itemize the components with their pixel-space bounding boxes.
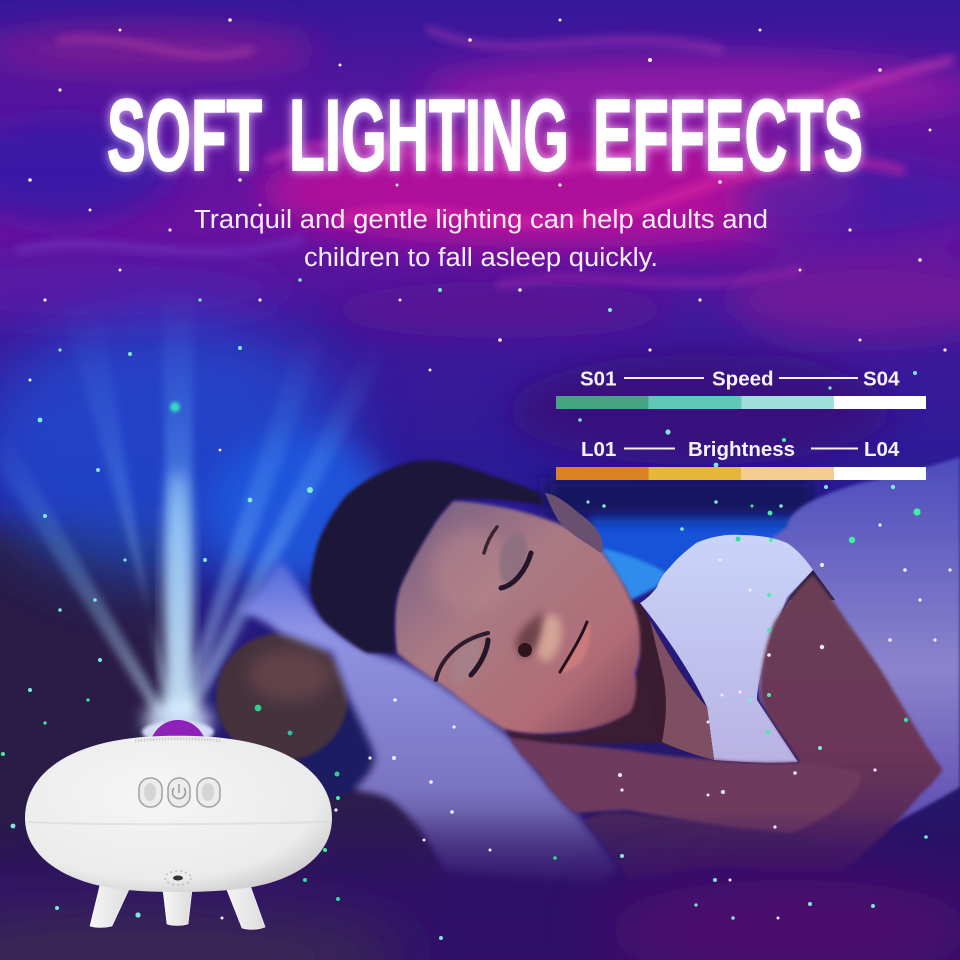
floor left (0, 910, 410, 960)
nostril (518, 643, 532, 657)
shirt (640, 535, 813, 763)
brightness labels: L04 (864, 438, 900, 461)
projector lamp (25, 720, 332, 929)
speed labels: Speed (712, 368, 774, 390)
lower lashes (471, 640, 488, 675)
dome (142, 720, 214, 743)
subtitle (194, 206, 768, 272)
speed labels: S01 (580, 368, 616, 390)
nose highlight (532, 612, 566, 664)
speed labels (580, 368, 900, 390)
speed labels: S04 (863, 368, 900, 390)
power symbol (172, 784, 186, 799)
upper eyelid (495, 530, 531, 586)
brightness scale (556, 438, 926, 480)
brightness labels: Brightness (688, 438, 795, 461)
mouth line (560, 622, 587, 672)
light blue pillow behind neck (601, 548, 666, 600)
brightness labels: L01 (581, 438, 616, 461)
brightness labels (581, 438, 900, 461)
speed bar (556, 396, 926, 409)
bottom magenta tint (600, 880, 960, 960)
button glyphs (144, 783, 214, 801)
stars (11, 278, 928, 940)
face (395, 500, 640, 734)
bed sheet right (740, 457, 960, 840)
boy (310, 460, 943, 880)
subtitle: Tranquil and gentle lighting can help adults and (194, 206, 768, 234)
brightness bar (556, 467, 926, 480)
port (173, 876, 183, 880)
grille (135, 739, 222, 741)
body (25, 736, 332, 892)
upper brow (484, 527, 497, 553)
nose shadow (516, 610, 542, 658)
ear (545, 493, 603, 553)
title: SOFT (107, 80, 262, 192)
light beams glow (0, 320, 355, 750)
green stars (1, 438, 921, 852)
sleeve shadow (775, 570, 835, 625)
title: LIGHTING (289, 80, 569, 192)
dark sofa left (0, 520, 440, 960)
lower arm (584, 813, 844, 880)
cheek glow (430, 528, 510, 612)
hair (310, 460, 545, 653)
buttons (139, 778, 220, 807)
lower eyelid (447, 634, 485, 686)
forearm and hand (510, 735, 861, 833)
speed scale (556, 368, 926, 409)
neck shadow (600, 600, 714, 760)
plush toy (216, 633, 372, 800)
jaw shadow (505, 660, 657, 744)
lower brow (436, 633, 488, 680)
bottom fade (0, 810, 960, 960)
dark shape under pillow (320, 796, 445, 930)
upper lashes (501, 553, 531, 588)
title (107, 80, 863, 192)
background: bedroom blue glow (210, 435, 815, 585)
lips (561, 620, 590, 672)
light beams fan (0, 290, 390, 715)
chest skin (650, 620, 714, 760)
subtitle: children to fall asleep quickly. (304, 244, 658, 272)
legs (90, 885, 265, 929)
upper arm (757, 575, 943, 870)
seam (28, 822, 328, 824)
pillow (240, 560, 618, 883)
